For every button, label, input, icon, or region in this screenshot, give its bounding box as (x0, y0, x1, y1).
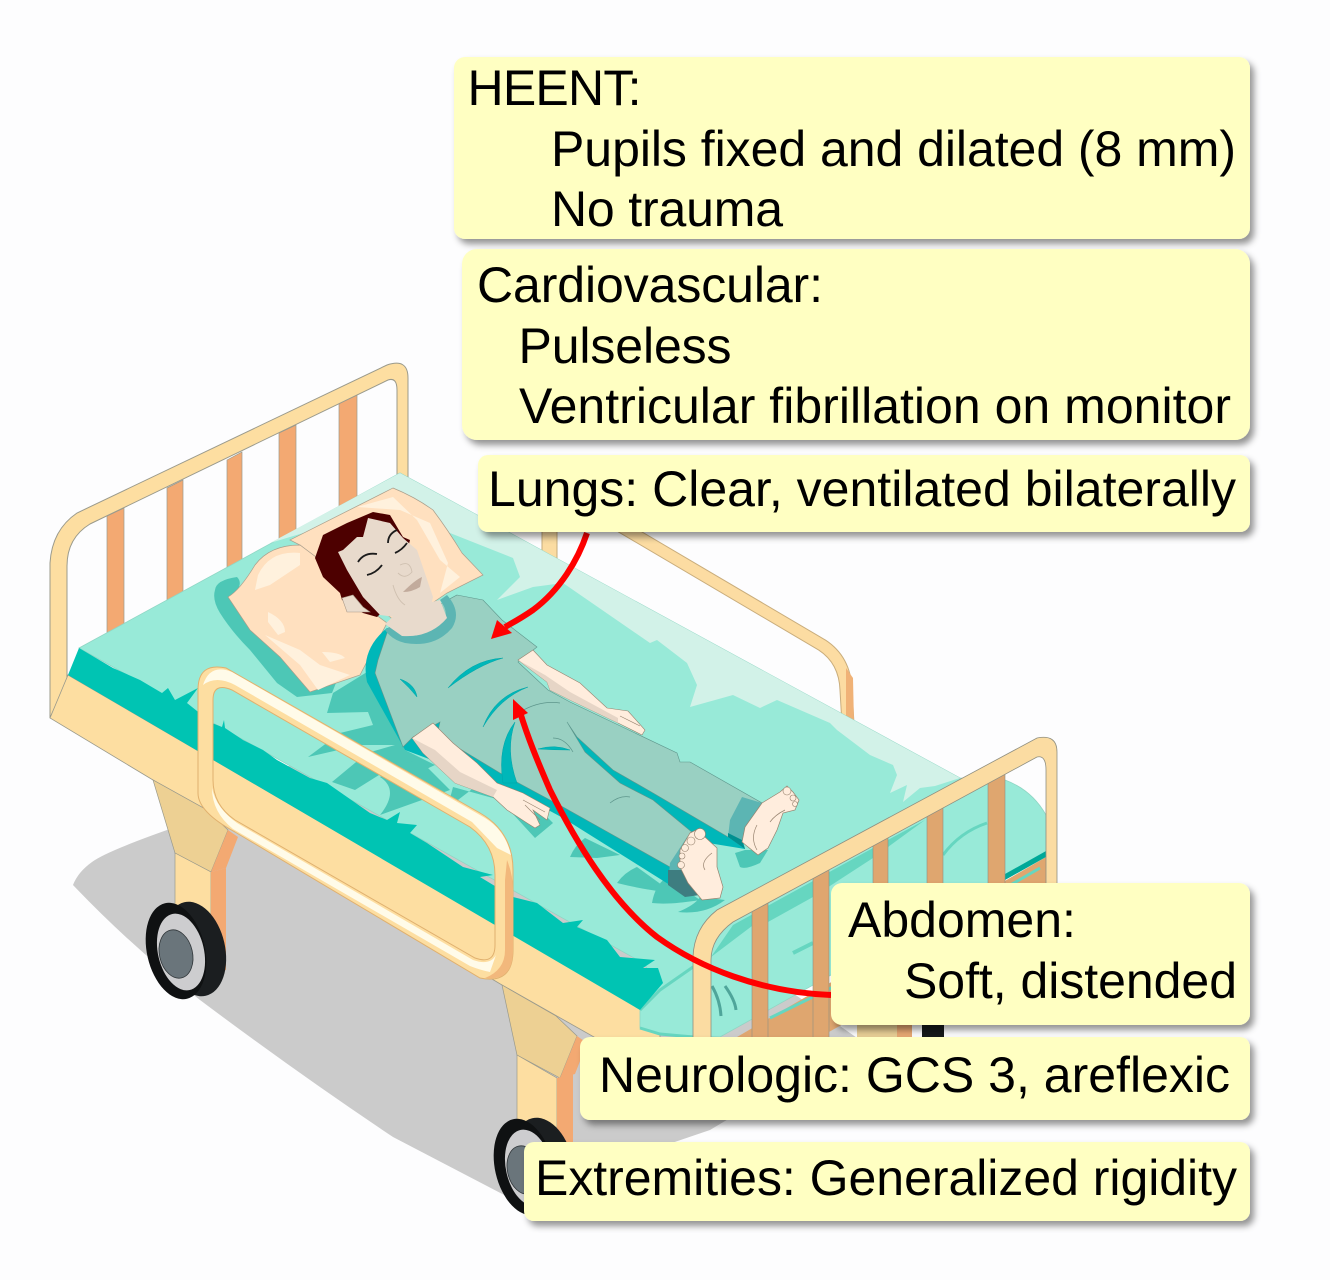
callout: Extremities (524, 1142, 1250, 1221)
callout: Abdomen: Soft, distended (904, 953, 1237, 1009)
callout: Neurologic: Neurologic: GCS 3, areflexic (599, 1047, 1230, 1103)
callout: Lungs: Lungs: Clear, ventilated bilaterally (488, 461, 1236, 517)
callout: Extremities: Extremities: Generalized rigidity (535, 1150, 1237, 1206)
neck (385, 600, 447, 636)
arrow: abdomen (513, 699, 831, 995)
callout: HEENT: HEENT: (468, 60, 642, 116)
front pillow (228, 545, 387, 692)
wheel (137, 895, 235, 1005)
callout: Cardiovascular: Cardiovascular: (477, 257, 823, 313)
headboard bars (107, 395, 357, 640)
arm left (412, 723, 550, 828)
floor shadow (73, 760, 860, 1198)
pillow shadow (214, 577, 345, 697)
arrow: lungs (491, 533, 587, 639)
front side rail (198, 667, 513, 979)
callout: Abdomen: Abdomen: (848, 892, 1076, 948)
mattress shadow strokes (308, 640, 768, 912)
bed base end (737, 857, 1046, 1037)
toes (678, 787, 798, 868)
callout: HEENT (454, 57, 1250, 239)
hand lines (523, 716, 640, 820)
hair (315, 512, 410, 617)
arm right (518, 650, 645, 735)
callout: Neurologic (580, 1037, 1250, 1120)
callout: HEENT: Pupils fixed and dilated (8 mm) (551, 121, 1236, 177)
trouser cuffs (728, 797, 762, 849)
callout: HEENT: No trauma (551, 181, 783, 237)
face (338, 518, 433, 618)
large body shadow (308, 640, 435, 790)
light sheet fold (270, 473, 960, 802)
back pillow (290, 488, 483, 625)
eyes and mouth (358, 530, 407, 575)
callout: Abdomen (831, 883, 1250, 1025)
headboard frame (50, 363, 408, 718)
headboard (50, 363, 408, 718)
feet (742, 786, 799, 855)
patient (315, 512, 799, 900)
mattress (68, 473, 1046, 1037)
footboard bars (752, 770, 1005, 1040)
far bed leg and wheel (857, 1010, 944, 1040)
near left leg and wheel (137, 780, 238, 1005)
callout: Cardiovascular: Pulseless (518, 318, 732, 374)
collar (385, 595, 456, 644)
base edge stripe (1005, 851, 1046, 880)
mattress side band (68, 648, 663, 1010)
clothing folds (400, 658, 570, 783)
body dark edge (366, 628, 745, 887)
callout: Cardiovascular (462, 249, 1250, 440)
overhang outline (640, 967, 693, 1037)
callout: Cardiovascular: Ventricular fibrillation on monitor (519, 378, 1231, 434)
near right leg and wheel (485, 985, 587, 1221)
bed side frame (50, 675, 660, 1075)
mattress top surface (79, 473, 1046, 1037)
bedding tuck marks (712, 986, 736, 1016)
ear (342, 595, 370, 612)
clothes (375, 595, 762, 867)
footboard (693, 737, 1057, 1040)
mattress end folds (711, 820, 925, 957)
far side rail (542, 520, 854, 724)
footboard frame (693, 737, 1057, 1040)
